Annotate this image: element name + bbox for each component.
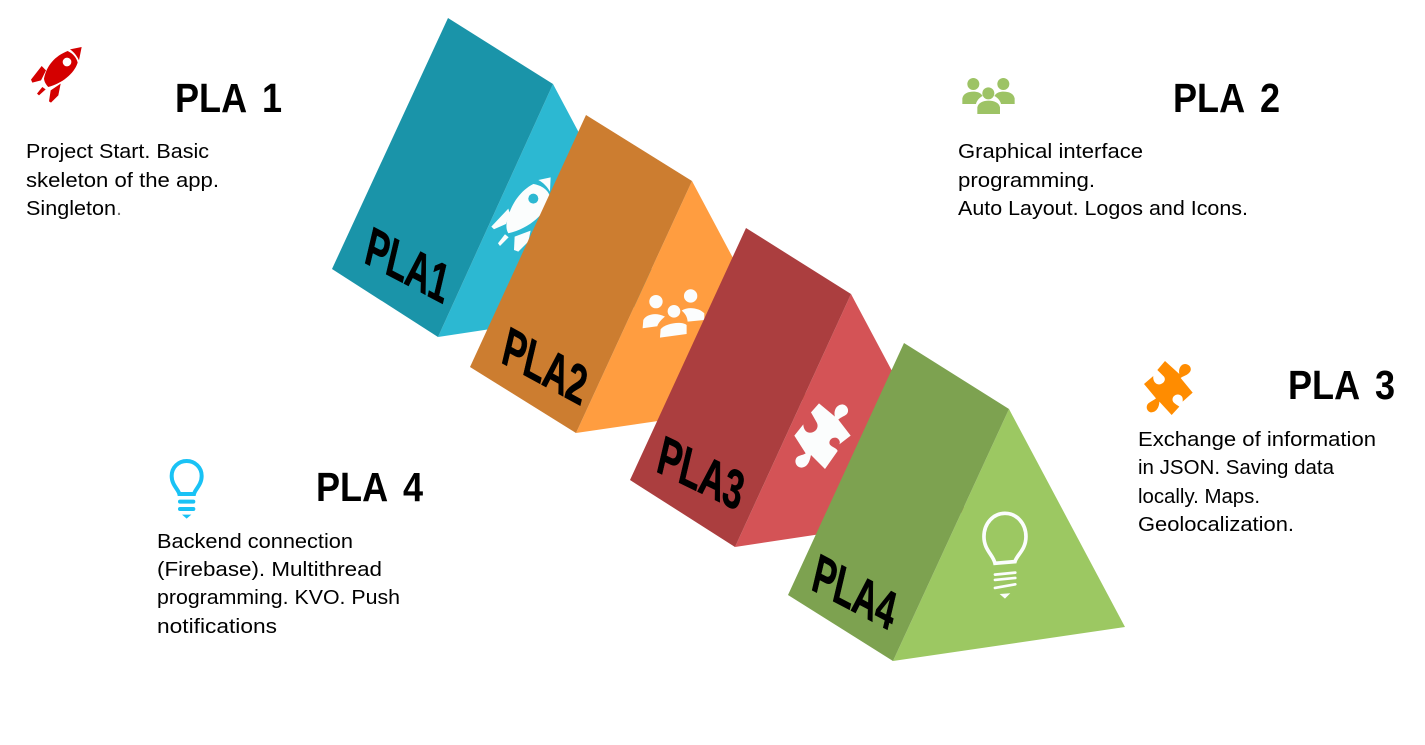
text: PLA 1 body	[26, 140, 219, 220]
icon: red rocket	[31, 47, 82, 103]
label: PLA1: PLA1	[360, 214, 455, 316]
panel: PLA 1 description	[26, 47, 282, 220]
heading: PLA 3: PLA 3	[1288, 363, 1395, 409]
text: PLA 2 body: Auto Layout. Logos and Icons.	[958, 197, 1248, 220]
text: PLA 3 body	[1138, 428, 1376, 536]
text: PLA 4 body	[157, 530, 400, 638]
prism: PLA2	[470, 115, 808, 433]
text: PLA 3 body: Geolocalization.	[1138, 513, 1294, 536]
icon: green people	[962, 78, 1015, 114]
text: PLA 1 body: Singleton.	[26, 197, 122, 220]
label: PLA3: PLA3	[652, 423, 749, 522]
text: PLA 3 body: Exchange of information	[1138, 428, 1376, 451]
text: PLA 2 body: Graphical interface	[958, 140, 1143, 163]
heading: PLA 2: PLA 2	[1173, 76, 1280, 122]
text: PLA 4 body: programming. KVO. Push	[157, 586, 400, 609]
panel: PLA 3 description	[1138, 361, 1395, 536]
heading: PLA 1: PLA 1	[175, 76, 282, 122]
text: PLA 2 body	[958, 140, 1248, 220]
icon: white puzzle piece	[794, 403, 851, 469]
prism: PLA3	[630, 228, 967, 547]
icon: white rocket	[491, 177, 551, 252]
prism: PLA1	[332, 18, 669, 337]
text: PLA 4 body: Backend connection	[157, 530, 353, 553]
text: PLA 4 body: (Firebase). Multithread	[157, 558, 382, 581]
label: PLA2: PLA2	[497, 314, 592, 417]
text: PLA 2 body: programming.	[958, 169, 1095, 192]
icon: orange puzzle piece	[1144, 361, 1193, 415]
icon: blue light bulb	[172, 461, 202, 519]
text: PLA 1 body: skeleton of the app.	[26, 169, 219, 192]
label: PLA4: PLA4	[807, 541, 902, 643]
icon: white light bulb	[984, 513, 1026, 599]
text: PLA 3 body: locally. Maps.	[1138, 485, 1260, 508]
prism: PLA4	[788, 343, 1125, 661]
heading: PLA 4: PLA 4	[316, 465, 424, 511]
text: PLA 1 body: Project Start. Basic	[26, 140, 209, 163]
text: PLA 4 body: notifications	[157, 615, 277, 638]
icon: white people	[643, 289, 704, 338]
text: PLA 3 body: in JSON. Saving data	[1138, 456, 1335, 479]
panel: PLA 2 description	[958, 76, 1280, 220]
panel: PLA 4 description	[157, 461, 424, 638]
